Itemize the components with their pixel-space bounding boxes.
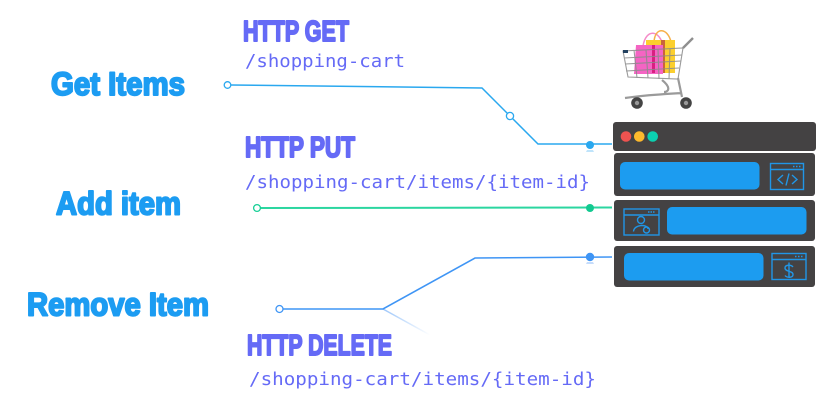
panel: user row bbox=[614, 200, 815, 241]
connector: Remove Item bbox=[276, 253, 612, 335]
icon: dollar window bbox=[772, 254, 806, 280]
label: Remove Item: Remove Item bbox=[27, 286, 209, 322]
panel: code row bbox=[614, 153, 815, 196]
icon: user window bbox=[624, 209, 659, 235]
heading: HTTP PUT: HTTP PUT bbox=[245, 132, 355, 164]
icon: shopping cart bbox=[623, 31, 693, 109]
heading: HTTP DELETE: HTTP DELETE bbox=[247, 330, 392, 362]
panel: window title bar bbox=[613, 122, 816, 151]
connector: Add item bbox=[254, 204, 612, 212]
panel: payment row bbox=[614, 246, 815, 287]
endpoint: DELETE path: /shopping-cart/items/{item-id} bbox=[249, 369, 596, 390]
connector: Get Items bbox=[224, 82, 612, 152]
label: Get Items: Get Items bbox=[51, 66, 185, 102]
label: Add item: Add item bbox=[56, 186, 181, 222]
endpoint: GET path: /shopping-cart bbox=[245, 51, 405, 72]
icon: code window bbox=[770, 164, 804, 190]
heading: HTTP GET: HTTP GET bbox=[243, 16, 349, 48]
endpoint: PUT path: /shopping-cart/items/{item-id} bbox=[245, 172, 590, 193]
